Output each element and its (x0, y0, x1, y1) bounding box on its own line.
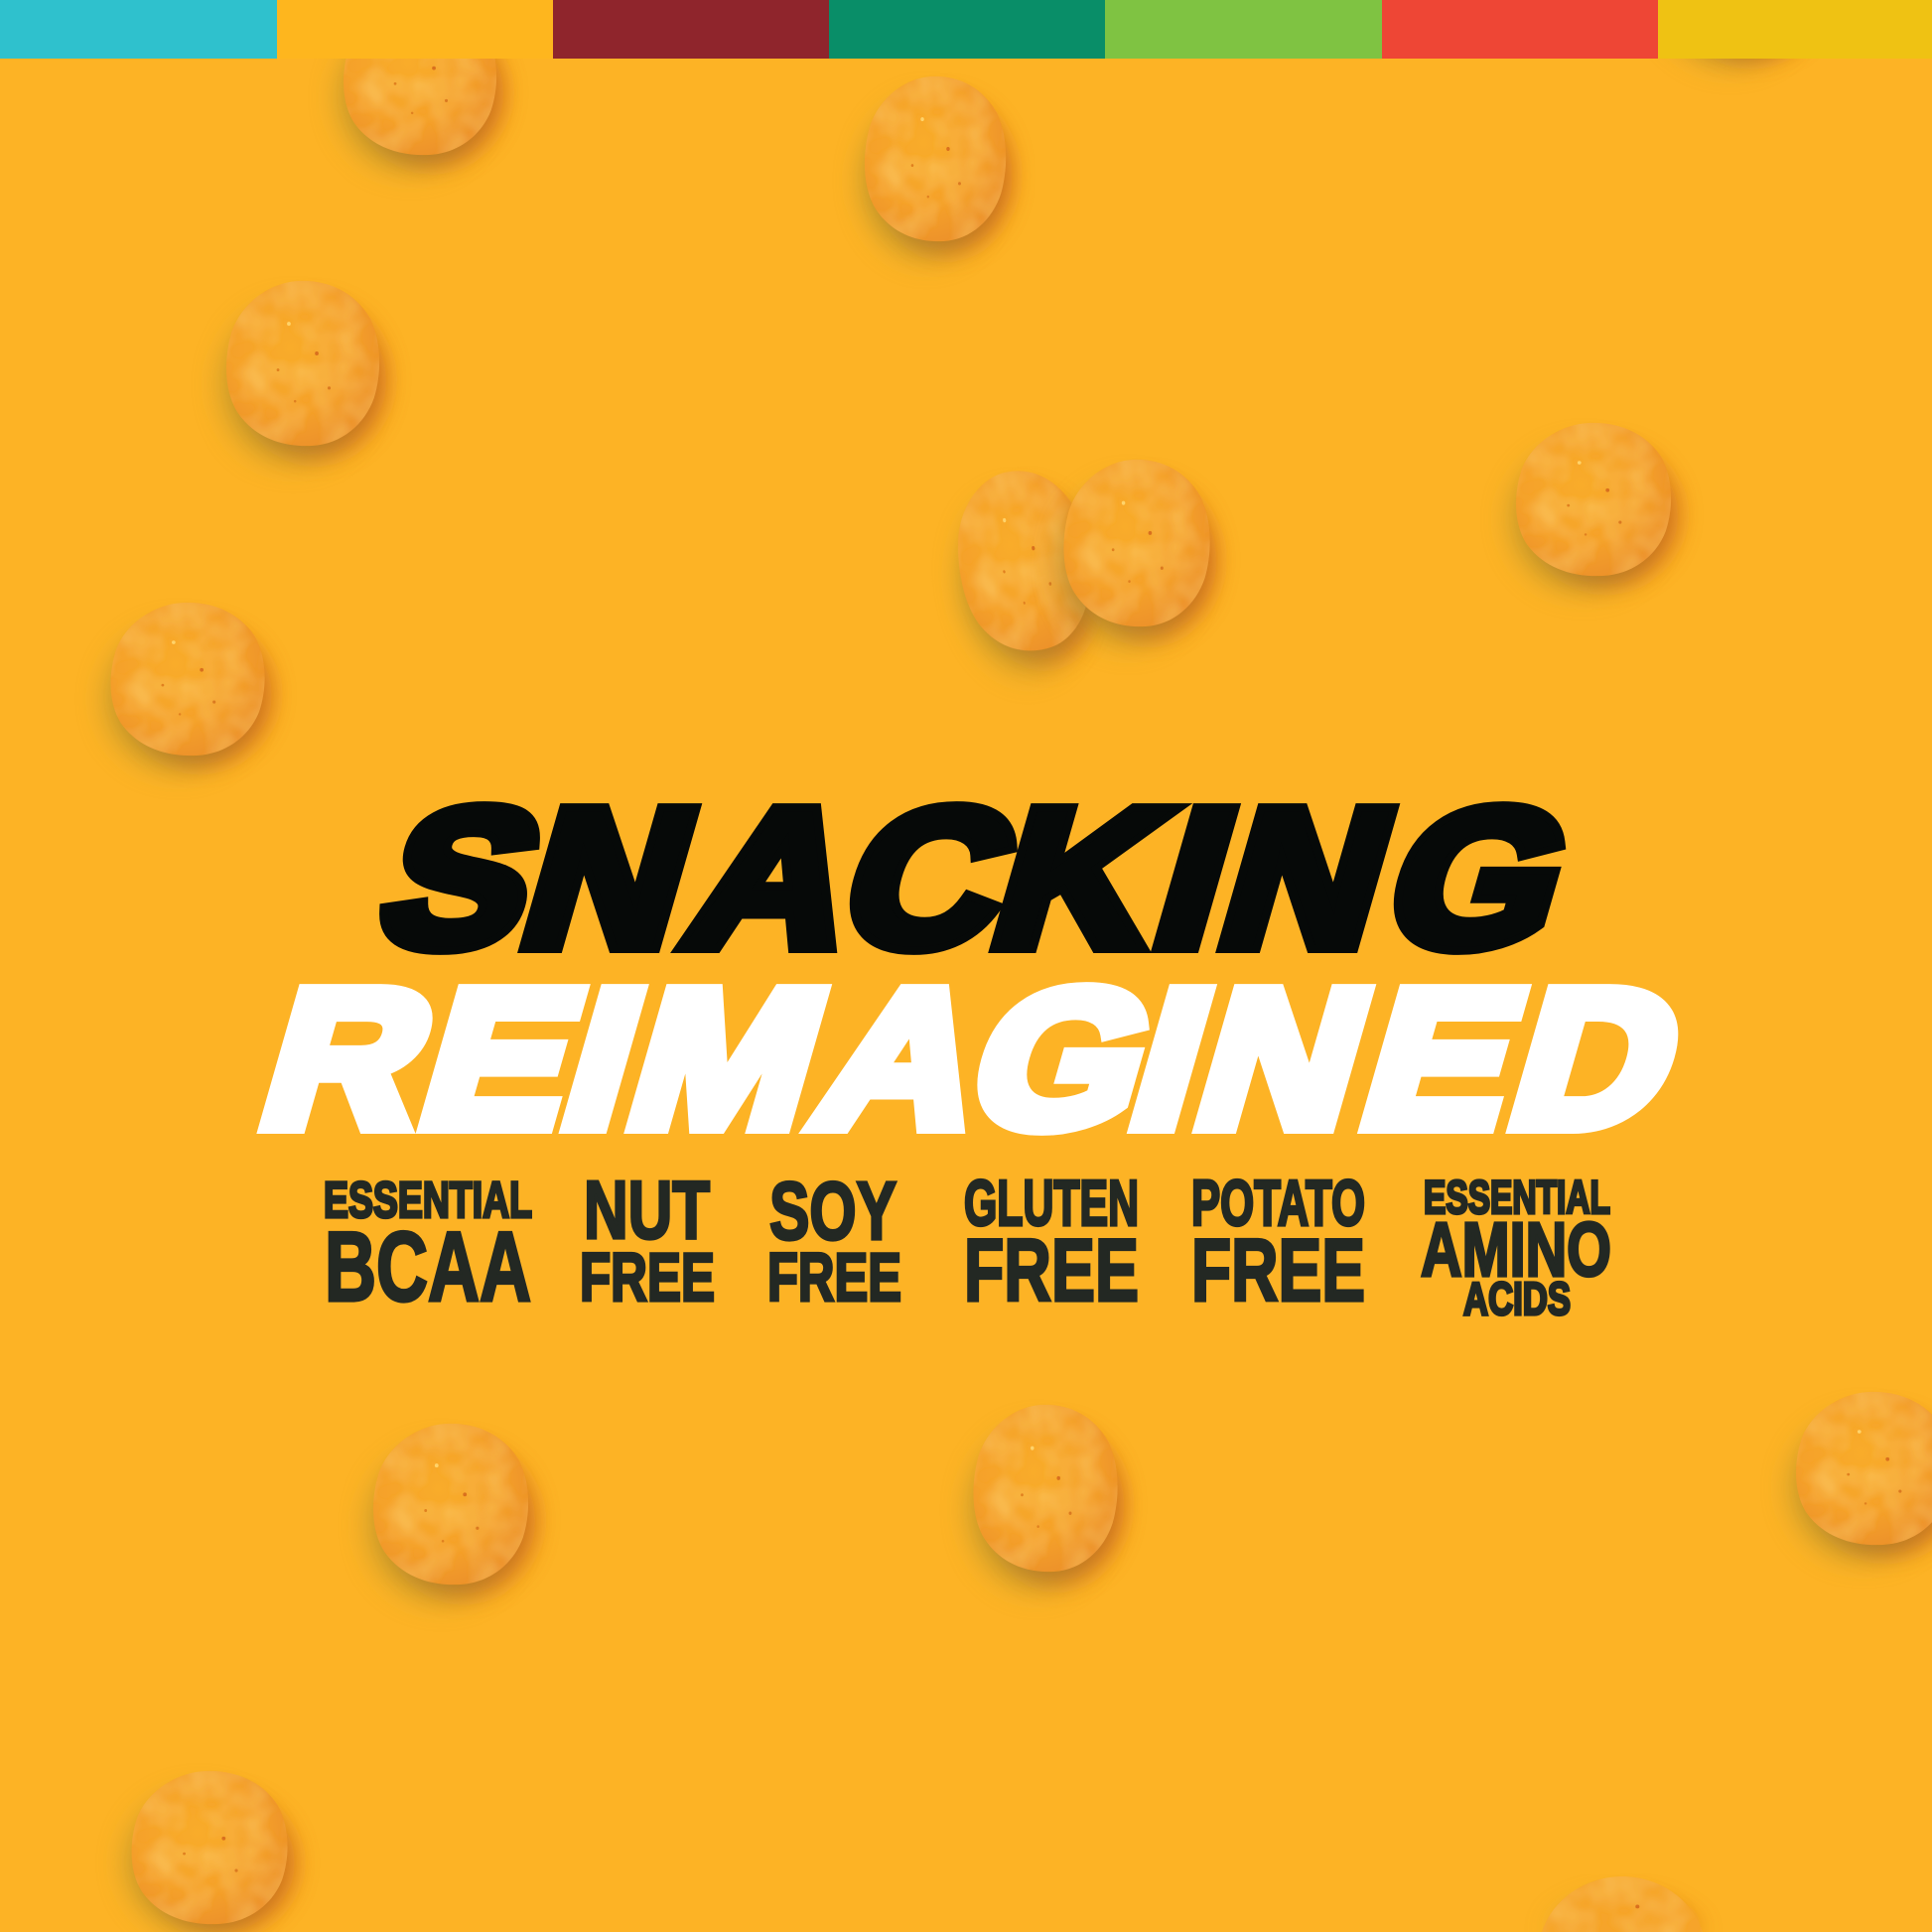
badge: potato free (1191, 1167, 1365, 1319)
badge: essential amino acids: ESSENTIAL (1424, 1171, 1610, 1223)
snack ball: middle left (106, 603, 272, 769)
snack ball: bottom right, cut by page edge (1542, 1876, 1703, 1932)
snack ball: lower left (369, 1424, 535, 1599)
badge: nut free (580, 1164, 715, 1315)
snack ball: upper right (1512, 423, 1678, 590)
badge: nut free: FREE (580, 1239, 715, 1315)
title: REIMAGINED: REIMAGINED (241, 951, 1706, 1168)
badge: nut free: NUT (584, 1164, 710, 1256)
snack ball: lower centre (970, 1405, 1124, 1587)
snack ball: pair right (1060, 460, 1216, 641)
colour bar (0, 0, 1932, 59)
badge: soy free (767, 1165, 901, 1315)
snack ball: top centre (861, 76, 1013, 256)
badge: essential BCAA: ESSENTIAL (324, 1172, 532, 1228)
badge: potato free: POTATO (1191, 1167, 1365, 1239)
badge: soy free: SOY (769, 1165, 897, 1257)
badge: essential amino acids: ACIDS (1463, 1273, 1571, 1324)
snack ball: lower right (1792, 1392, 1932, 1559)
title: SNACKING: SNACKING (360, 770, 1593, 987)
snack ball: bottom left (127, 1771, 295, 1932)
badge: essential amino acids: AMINO (1421, 1207, 1611, 1293)
badge: gluten free: FREE (964, 1220, 1139, 1319)
badge: potato free: FREE (1191, 1220, 1365, 1319)
snack ball: pair left (941, 460, 1112, 678)
badge: essential BCAA: BCAA (325, 1211, 531, 1321)
snack ball: top right, behind colour bar (1678, 59, 1799, 79)
badge: essential amino acids (1421, 1171, 1611, 1324)
snack ball: top left (326, 59, 516, 185)
badge: gluten free (964, 1167, 1139, 1319)
badge: gluten free: GLUTEN (964, 1167, 1139, 1239)
badge: essential BCAA (324, 1172, 532, 1321)
badge: soy free: FREE (767, 1239, 901, 1315)
snack ball: upper left (222, 281, 386, 461)
